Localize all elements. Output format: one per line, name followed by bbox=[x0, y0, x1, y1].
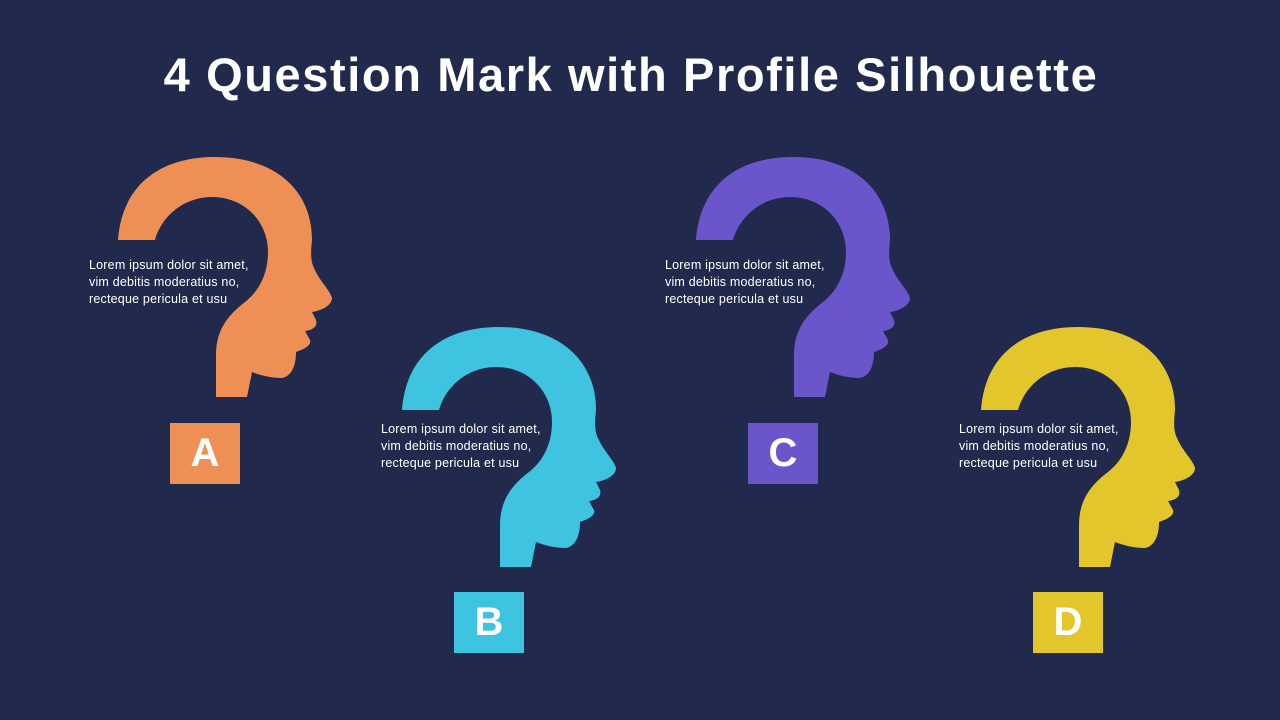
text B: Lorem ipsum dolor sit amet, bbox=[381, 422, 541, 436]
label A bbox=[170, 423, 240, 484]
icon: silhouette B bbox=[402, 327, 616, 567]
text A: Lorem ipsum dolor sit amet, bbox=[89, 258, 249, 272]
label D: D bbox=[1054, 600, 1082, 644]
icon: silhouette C bbox=[696, 157, 910, 397]
text D bbox=[959, 422, 1119, 470]
text C: Lorem ipsum dolor sit amet, bbox=[665, 258, 825, 272]
text A bbox=[89, 258, 249, 306]
text C bbox=[665, 258, 825, 306]
text D: vim debitis moderatius no, bbox=[959, 439, 1109, 453]
title: 4 Question Mark with Profile Silhouette bbox=[164, 48, 1098, 101]
label C bbox=[748, 423, 818, 484]
text D: recteque pericula et usu bbox=[959, 456, 1097, 470]
label A: A bbox=[191, 431, 219, 475]
label D bbox=[1033, 592, 1103, 653]
text C: recteque pericula et usu bbox=[665, 292, 803, 306]
label C: C bbox=[769, 431, 797, 475]
text B: vim debitis moderatius no, bbox=[381, 439, 531, 453]
text D: Lorem ipsum dolor sit amet, bbox=[959, 422, 1119, 436]
icon: silhouette A bbox=[118, 157, 332, 397]
text B: recteque pericula et usu bbox=[381, 456, 519, 470]
text A: recteque pericula et usu bbox=[89, 292, 227, 306]
label B: B bbox=[475, 600, 503, 644]
text C: vim debitis moderatius no, bbox=[665, 275, 815, 289]
text A: vim debitis moderatius no, bbox=[89, 275, 239, 289]
label B bbox=[454, 592, 524, 653]
text B bbox=[381, 422, 541, 470]
icon: silhouette D bbox=[981, 327, 1195, 567]
